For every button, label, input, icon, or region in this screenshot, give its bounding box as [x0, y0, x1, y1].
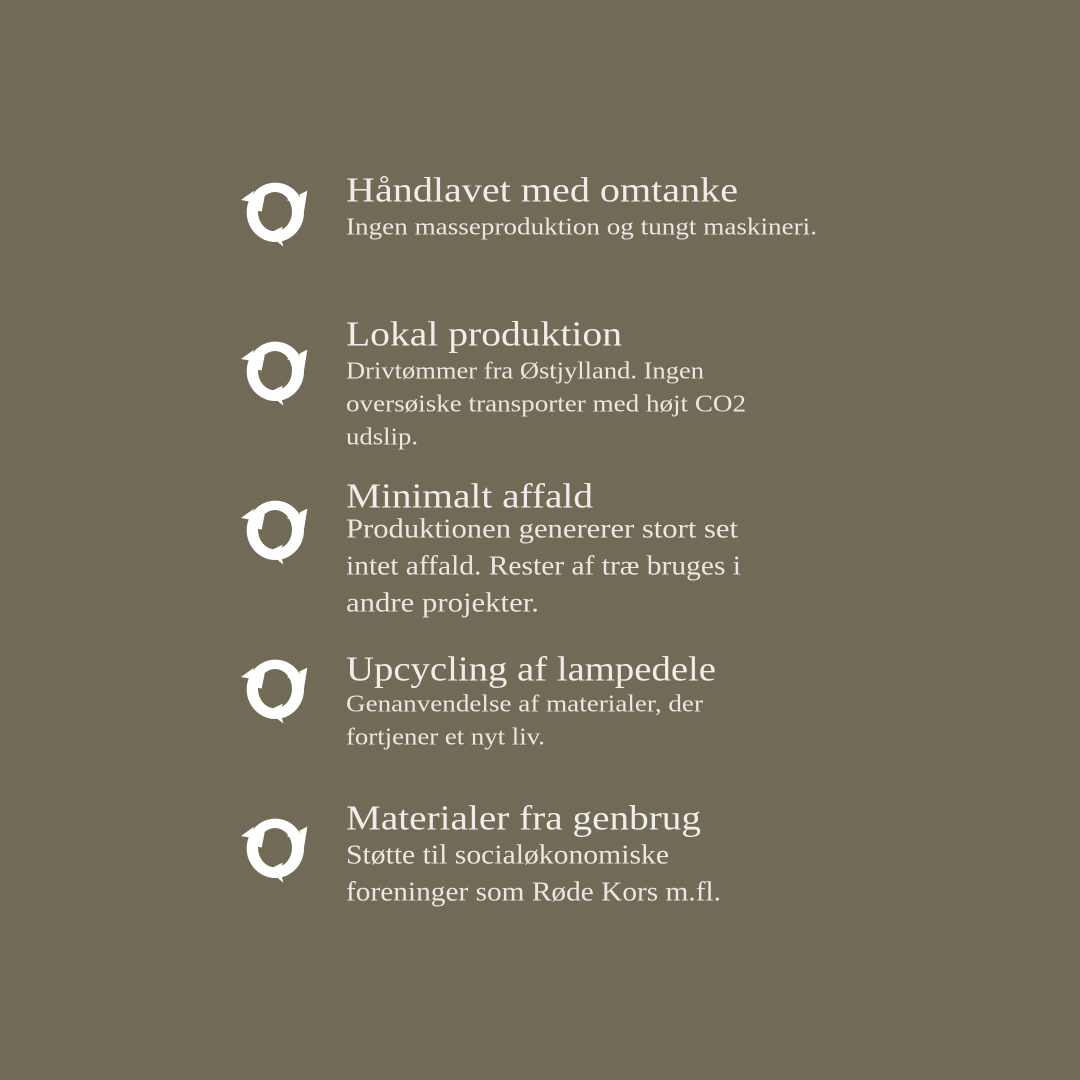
text block: foreninger som Røde Kors m.fl. [346, 876, 721, 906]
icon: recycling arrows [241, 501, 307, 565]
heading: Minimalt affald [346, 478, 593, 516]
icon: recycling arrows [241, 342, 307, 406]
text block: Genanvendelse af materialer, der [346, 690, 703, 718]
text block: fortjener et nyt liv. [346, 724, 545, 750]
text block: oversøiske transporter med højt CO2 [346, 390, 746, 418]
text block [346, 358, 746, 450]
text block: Drivtømmer fra Østjylland. Ingen [346, 358, 704, 384]
text block [346, 840, 721, 906]
item: Upcycling af lampedele [241, 650, 716, 750]
item: Lokal produktion [241, 316, 746, 450]
item: Minimalt affald [241, 478, 741, 618]
icon: recycling arrows [241, 660, 307, 724]
item: Håndlavet med omtanke [241, 172, 817, 247]
text block: intet affald. Rester af træ bruges i [346, 550, 741, 580]
item: Materialer fra genbrug [241, 800, 721, 906]
heading: Lokal produktion [346, 316, 622, 354]
text block: Produktionen genererer stort set [346, 514, 739, 544]
text block: udslip. [346, 424, 418, 450]
text block: Støtte til socialøkonomiske [346, 840, 669, 870]
text block [346, 514, 741, 618]
icon: recycling arrows [241, 819, 307, 883]
text block: Ingen masseproduktion og tungt maskineri. [346, 214, 817, 240]
text block: andre projekter. [346, 588, 539, 618]
text block [346, 690, 703, 750]
heading: Upcycling af lampedele [346, 650, 716, 688]
heading: Materialer fra genbrug [346, 800, 701, 838]
icon: recycling arrows [241, 183, 307, 247]
heading: Håndlavet med omtanke [346, 172, 738, 210]
